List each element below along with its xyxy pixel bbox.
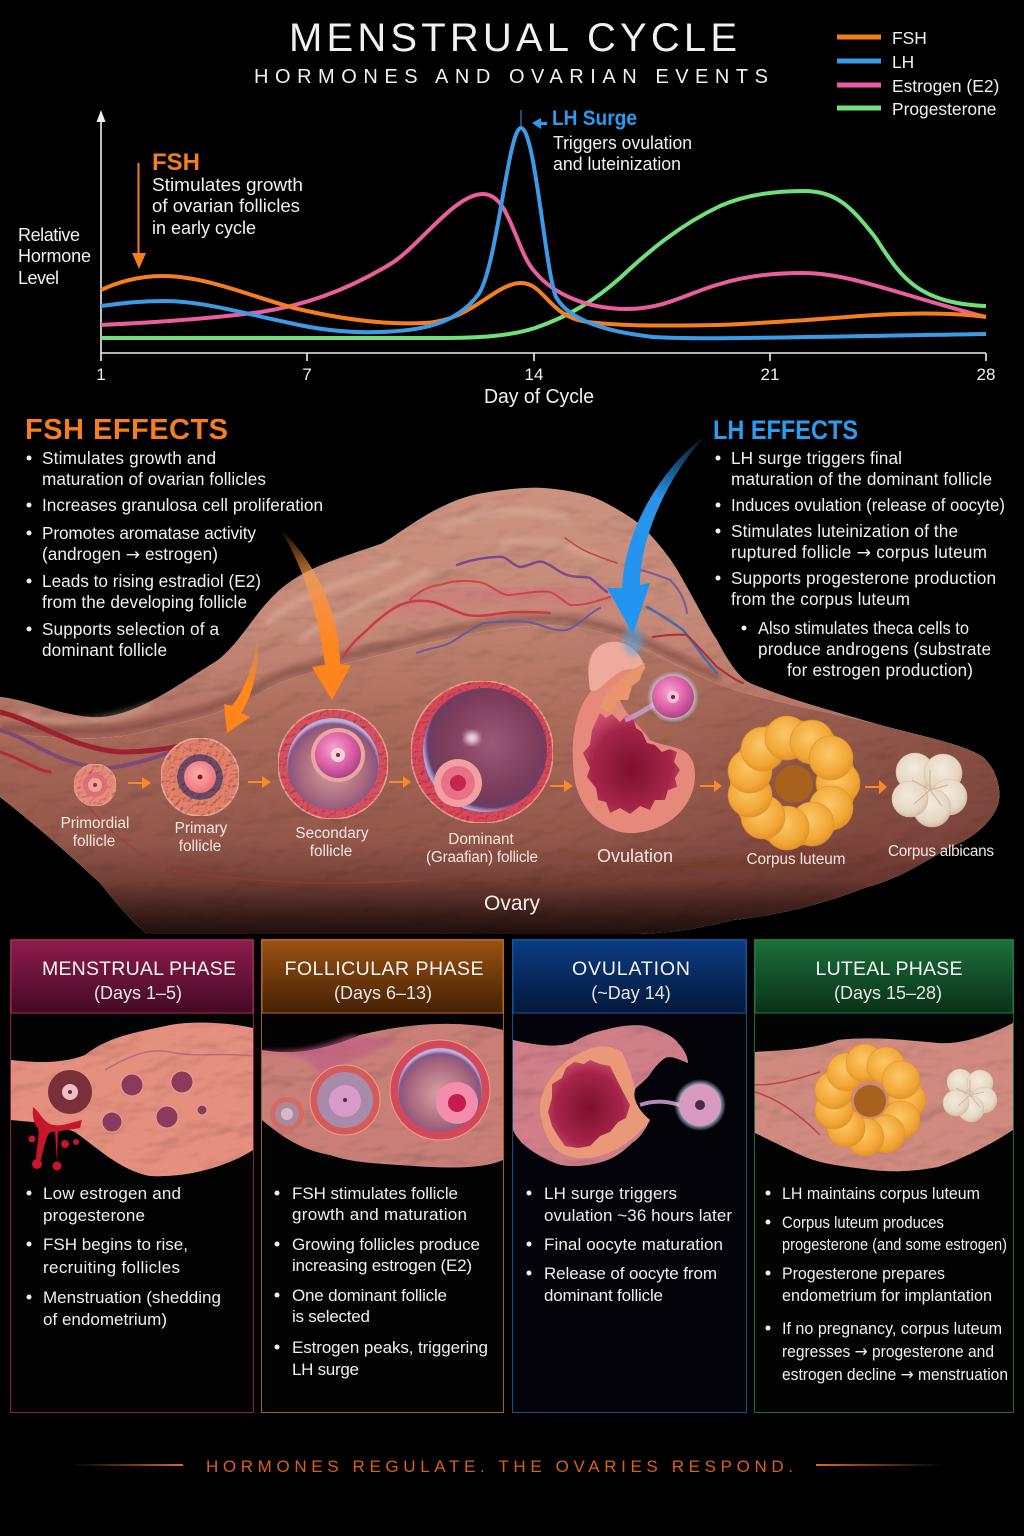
panel: menstrual phase: [10, 940, 254, 1412]
luteal bullets: LH maintains corpus luteum: [782, 1184, 980, 1203]
folds: [170, 840, 900, 889]
x axis ticks: 1: [96, 365, 106, 384]
curve: FSH: [101, 276, 986, 326]
menstrual bullets: progesterone: [43, 1206, 145, 1225]
follicular bullets: Growing follicles produce: [292, 1235, 480, 1254]
panel header: MENSTRUAL PHASE: [42, 958, 236, 980]
primordial follicle: [74, 764, 116, 806]
FSH effects list: [25, 414, 323, 660]
luteal bullets: Corpus luteum produces: [782, 1213, 944, 1232]
stage labels: Primary: [175, 820, 228, 837]
panel header: OVULATION: [572, 958, 690, 980]
FSH effects list: dominant follicle: [42, 640, 167, 660]
menstrual ovary image: [11, 1023, 253, 1176]
panel header: [513, 940, 746, 1013]
panel header: [755, 940, 1013, 1013]
LH effects list: Induces ovulation (release of oocyte): [731, 495, 1005, 515]
ovulation: ruptured follicle and oocyte: [573, 642, 699, 833]
LH arrow: [607, 436, 705, 656]
LH effects list: [713, 415, 1005, 680]
menstrual bullets: [26, 1184, 221, 1329]
stage labels: [61, 815, 994, 868]
stage labels: Corpus albicans: [888, 843, 994, 860]
FSH annotation: [132, 149, 303, 269]
panel header: LUTEAL PHASE: [816, 958, 962, 980]
FSH effects list: maturation of ovarian follicles: [42, 469, 266, 489]
curve: estrogen: [101, 194, 986, 325]
y axis label: Relative: [18, 225, 80, 245]
FSH effects list: Promotes aromatase activity: [42, 523, 256, 543]
corpus albicans: [892, 753, 967, 827]
stage labels: follicle: [179, 838, 221, 855]
LH effects list: Stimulates luteinization of the: [731, 521, 958, 541]
x axis title: Day of Cycle: [484, 386, 594, 408]
legend: LH: [892, 52, 914, 72]
follicular bullets: [274, 1184, 488, 1379]
follicular bullets: One dominant follicle: [292, 1286, 447, 1305]
panel header: (Days 6–13): [334, 983, 432, 1003]
LH surge annotation: [532, 107, 692, 174]
ovulation bullets: [526, 1184, 732, 1305]
x axis ticks: 21: [761, 365, 779, 384]
panel header: [11, 940, 253, 1013]
follicular bullets: Estrogen peaks, triggering: [292, 1338, 488, 1357]
hormone line chart: [18, 107, 995, 408]
stage labels: Secondary: [295, 825, 369, 842]
ovulation bullets: LH surge triggers: [544, 1184, 677, 1203]
x axis ticks: 28: [977, 365, 995, 384]
LH effects list: ruptured follicle → corpus luteum: [731, 542, 987, 563]
luteal bullets: estrogen decline → menstruation: [782, 1365, 1008, 1385]
menstrual bullets: Low estrogen and: [43, 1184, 181, 1203]
curve: progesterone: [101, 191, 986, 338]
menstrual bullets: of endometrium): [43, 1310, 167, 1329]
menstrual bullets: FSH begins to rise,: [43, 1235, 188, 1254]
LH effects list: maturation of the dominant follicle: [731, 469, 992, 489]
ovulation image: [513, 1025, 726, 1166]
FSH effects list: from the developing follicle: [42, 592, 247, 612]
luteal bullets: If no pregnancy, corpus luteum: [782, 1319, 1002, 1338]
stage labels: Primordial: [61, 815, 129, 832]
luteal bullets: Progesterone prepares: [782, 1264, 945, 1283]
x axis ticks: 7: [302, 365, 312, 384]
follicular bullets: increasing estrogen (E2): [292, 1256, 472, 1275]
LH effects list: from the corpus luteum: [731, 589, 910, 609]
FSH annotation: of ovarian follicles: [152, 196, 300, 216]
y axis label: Hormone: [18, 246, 91, 266]
LH effects list: for estrogen production): [787, 660, 973, 680]
LH effects list: Also stimulates theca cells to: [758, 618, 969, 638]
follicular bullets: LH surge: [292, 1360, 359, 1379]
secondary follicle: [278, 709, 388, 819]
LH surge annotation: and luteinization: [553, 154, 681, 174]
ovary illustration: [0, 436, 999, 934]
stage labels: follicle: [73, 833, 115, 850]
follicular ovary image: [262, 1024, 503, 1167]
FSH effects list: (androgen → estrogen): [42, 544, 218, 565]
stage labels: (Graafian) follicle: [426, 849, 538, 866]
x axis ticks: 14: [525, 365, 543, 384]
y axis label: Level: [18, 268, 59, 288]
luteal bullets: endometrium for implantation: [782, 1286, 992, 1305]
stage arrows: [128, 776, 887, 794]
lobe shadow: [0, 619, 720, 731]
legend: Progesterone: [892, 99, 996, 119]
x axis ticks: [96, 365, 995, 384]
legend: FSH: [892, 28, 927, 48]
LH surge annotation: Triggers ovulation: [553, 133, 692, 153]
panel header: (Days 1–5): [94, 983, 182, 1003]
LH effects list: LH surge triggers final: [731, 448, 902, 468]
LH effects list: produce androgens (substrate: [758, 639, 991, 659]
ovary lower lobe: [0, 626, 999, 934]
ovulation bullets: dominant follicle: [544, 1286, 663, 1305]
panel: luteal phase: [754, 940, 1014, 1412]
footer tagline: HORMONES REGULATE. THE OVARIES RESPOND.: [206, 1457, 793, 1476]
FSH effects list: FSH EFFECTS: [25, 414, 228, 446]
title: MENSTRUAL CYCLE: [289, 16, 737, 60]
primary follicle: [161, 738, 239, 816]
FSH effects list: Increases granulosa cell proliferation: [42, 495, 323, 515]
curve: LH: [101, 128, 986, 338]
follicular bullets: FSH stimulates follicle: [292, 1184, 458, 1203]
ovary label: Ovary: [484, 892, 540, 915]
FSH arrow large: [278, 527, 351, 700]
ovary body: [0, 488, 999, 934]
corpus luteum: [728, 716, 860, 850]
hump highlights: [20, 511, 600, 722]
luteal bullets: [766, 1184, 1008, 1385]
ovulation bullets: ovulation ~36 hours later: [544, 1206, 732, 1225]
FSH effects list: Stimulates growth and: [42, 448, 216, 468]
stage labels: Dominant: [448, 831, 514, 848]
stage labels: Corpus luteum: [746, 851, 846, 868]
FSH effects list: Supports selection of a: [42, 619, 219, 639]
luteal ovary image: [755, 1023, 1013, 1171]
FSH annotation: in early cycle: [152, 218, 256, 238]
axes: [96, 110, 986, 361]
follicular bullets: growth and maturation: [292, 1205, 467, 1224]
FSH arrow small: [224, 632, 258, 733]
panel header: (~Day 14): [591, 983, 671, 1003]
panel: ovulation: [512, 940, 746, 1412]
dominant Graafian follicle: [411, 681, 553, 823]
LH surge annotation: LH Surge: [552, 107, 637, 130]
panel header: (Days 15–28): [834, 983, 942, 1003]
panel header: [262, 940, 503, 1013]
LH effects list: Supports progesterone production: [731, 568, 996, 588]
FSH annotation: FSH: [152, 149, 200, 176]
follicular bullets: is selected: [292, 1307, 370, 1326]
vessel flush: [400, 593, 610, 612]
y axis label: [18, 225, 91, 288]
stage labels: follicle: [310, 843, 352, 860]
blood vessels: [0, 538, 743, 883]
ovulation bullets: Release of oocyte from: [544, 1264, 717, 1283]
panel: follicular phase: [262, 940, 504, 1412]
menstrual bullets: Menstruation (shedding: [43, 1288, 221, 1307]
ovulation bullets: Final oocyte maturation: [544, 1235, 723, 1254]
FSH annotation: Stimulates growth: [152, 175, 303, 195]
menstrual bullets: recruiting follicles: [43, 1258, 180, 1277]
panel header: FOLLICULAR PHASE: [284, 958, 484, 980]
legend: [837, 28, 999, 119]
luteal bullets: regresses → progesterone and: [782, 1342, 994, 1362]
stage labels: Ovulation: [597, 846, 673, 866]
LH effects list: LH EFFECTS: [713, 415, 858, 445]
FSH effects list: Leads to rising estradiol (E2): [42, 571, 261, 591]
subtitle: HORMONES AND OVARIAN EVENTS: [254, 66, 768, 88]
legend: Estrogen (E2): [892, 76, 999, 96]
